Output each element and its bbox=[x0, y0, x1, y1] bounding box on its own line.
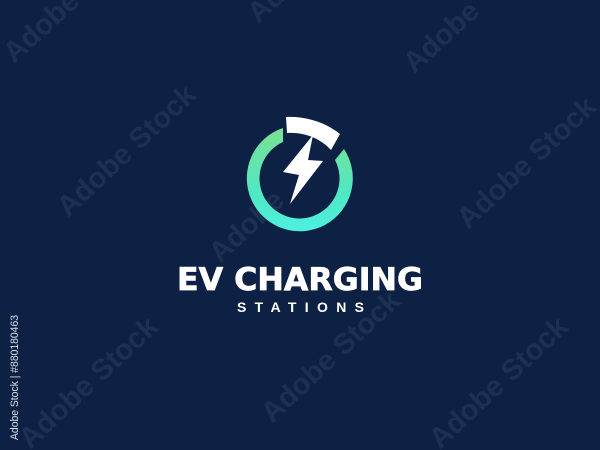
title: EV CHARGING bbox=[177, 262, 423, 298]
subtitle: STATIONS bbox=[237, 299, 364, 315]
watermarks: Adobe Stock bbox=[451, 90, 600, 235]
stock id label: Adobe Stock | #880180463 bbox=[9, 315, 21, 440]
green gradient ring arc bbox=[247, 128, 353, 231]
watermarks: Adobe Stock bbox=[51, 78, 203, 223]
lightning bolt bbox=[283, 135, 323, 204]
white top arc segment bbox=[286, 117, 340, 150]
watermarks: Adobe bbox=[203, 184, 291, 269]
icon: charging ring bbox=[247, 117, 353, 231]
watermarks: Adobe Stock bbox=[255, 284, 407, 429]
